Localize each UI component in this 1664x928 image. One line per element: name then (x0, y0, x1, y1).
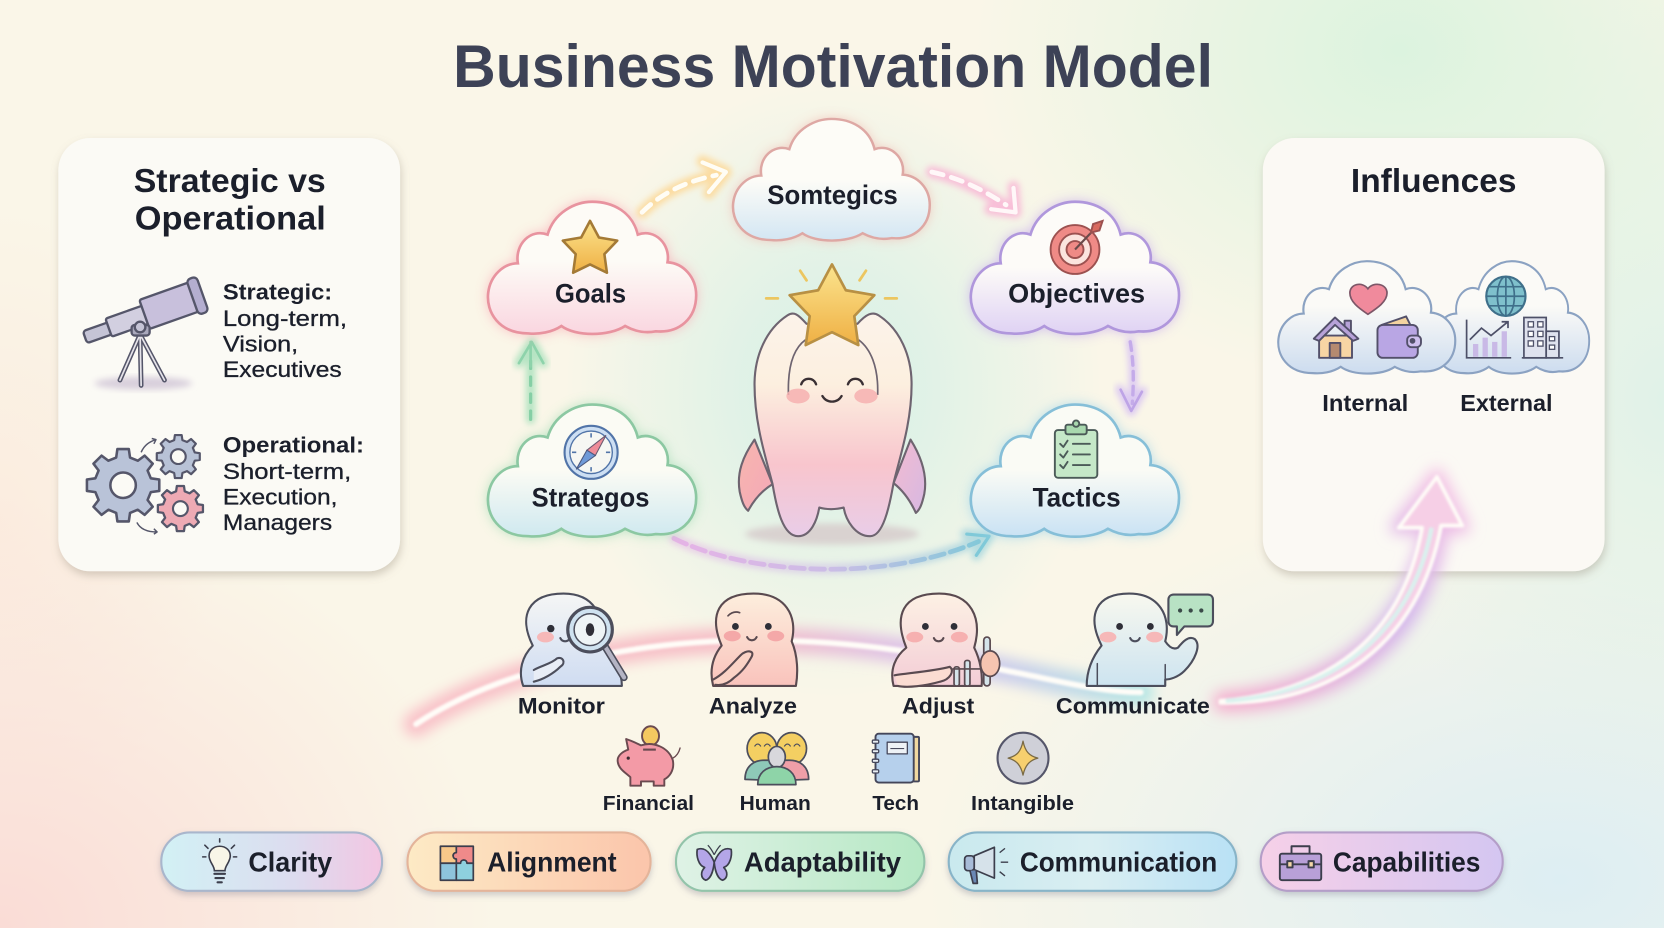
label: Analyze (709, 694, 797, 719)
label: Tactics (1033, 482, 1121, 512)
label: Objectives (1008, 279, 1145, 309)
icon: puzzle (440, 846, 473, 880)
panel: influences (1263, 138, 1605, 571)
operational text (223, 432, 364, 535)
cloud: external (1434, 261, 1589, 374)
icon: butterfly (697, 845, 731, 880)
label: Human (740, 793, 811, 815)
label: Tech (872, 793, 919, 815)
cloud: objectives (971, 202, 1179, 334)
operational text: Managers (223, 510, 332, 535)
strategic text: Vision, (223, 331, 298, 356)
label: Strategos (532, 482, 649, 512)
icon: gears (87, 435, 203, 534)
icon: heart (1350, 284, 1387, 314)
icon: sparkle coin (998, 733, 1048, 784)
resource: intangible (971, 733, 1074, 815)
label: Alignment (487, 847, 617, 878)
label: Monitor (518, 694, 605, 719)
strategic text: Executives (223, 357, 342, 382)
label: Adaptability (744, 847, 902, 878)
label: Clarity (248, 847, 333, 878)
icon: clipboard (1055, 420, 1097, 478)
label: Somtegics (767, 180, 898, 210)
icon: briefcase (1280, 846, 1321, 880)
label: external: External (1460, 390, 1553, 416)
big star (790, 264, 874, 345)
label: internal: Internal (1322, 390, 1408, 416)
stage: monitor (518, 594, 624, 719)
icon: piggy bank (618, 726, 680, 786)
character: analyze (711, 594, 797, 686)
arrow: goals to center cloud (642, 161, 726, 212)
arrow: strategies to tactics (674, 534, 989, 569)
stage: analyze (709, 594, 797, 719)
icon: wallet (1377, 316, 1421, 358)
operational text: Operational: (223, 432, 364, 457)
character: adjust (892, 594, 1000, 687)
icon: people group (745, 733, 809, 785)
icon: megaphone (965, 847, 1008, 883)
pill: communication (949, 832, 1236, 891)
icon: star (563, 221, 617, 273)
cloud: center top (733, 119, 930, 241)
icon: building (1522, 317, 1563, 358)
strategic text: Strategic: (223, 279, 332, 304)
panel heading: Influences (1351, 162, 1516, 199)
mascot: rocket character holding star (739, 264, 925, 545)
arrow: objectives to tactics (1120, 342, 1143, 412)
icon: lightbulb (203, 839, 237, 882)
stage: communicate (1056, 594, 1213, 719)
cloud: goals (488, 202, 696, 334)
label: Financial (603, 793, 694, 815)
icon: telescope (78, 276, 209, 390)
icon: house (1314, 317, 1358, 358)
panel heading: Strategic vs (134, 162, 326, 199)
label: Adjust (902, 694, 975, 719)
ribbon: progress wave (416, 640, 1141, 724)
cloud: internal (1278, 261, 1455, 374)
operational text: Execution, (223, 484, 337, 509)
icon: target (1051, 221, 1103, 274)
pill: capabilities (1261, 832, 1503, 891)
resource: tech (872, 734, 919, 815)
pill: alignment (408, 832, 651, 891)
pill: adaptability (676, 832, 924, 891)
icon: compass (565, 426, 618, 479)
stage: adjust (892, 594, 1000, 719)
operational text: Short-term, (223, 459, 351, 484)
panel heading (134, 162, 326, 236)
mascot face (786, 379, 878, 403)
cloud: strategies (488, 405, 696, 537)
strategic text (223, 279, 347, 382)
label: Capabilities (1333, 847, 1480, 878)
panel: strategic vs operational (58, 138, 400, 571)
label: Communication (1020, 847, 1217, 878)
label: Communicate (1056, 694, 1210, 719)
label: Intangible (971, 793, 1074, 815)
arrow: center cloud to objectives (932, 172, 1016, 212)
character: monitor (521, 594, 624, 686)
character: communicate (1087, 594, 1213, 686)
star rays (766, 271, 897, 298)
icon: notebook (872, 734, 919, 783)
resource: human (740, 733, 811, 815)
label: Goals (555, 279, 626, 309)
arrow: to influences (1220, 475, 1463, 705)
cloud: tactics (971, 405, 1179, 537)
strategic text: Long-term, (223, 306, 347, 331)
arrow: strategies to goals (519, 342, 543, 419)
icon: growth chart (1467, 320, 1511, 358)
resource: financial (603, 726, 694, 815)
title: Business Motivation Model (453, 32, 1213, 100)
panel heading: Operational (135, 199, 326, 236)
pill: clarity (161, 832, 382, 891)
icon: globe (1486, 277, 1526, 316)
